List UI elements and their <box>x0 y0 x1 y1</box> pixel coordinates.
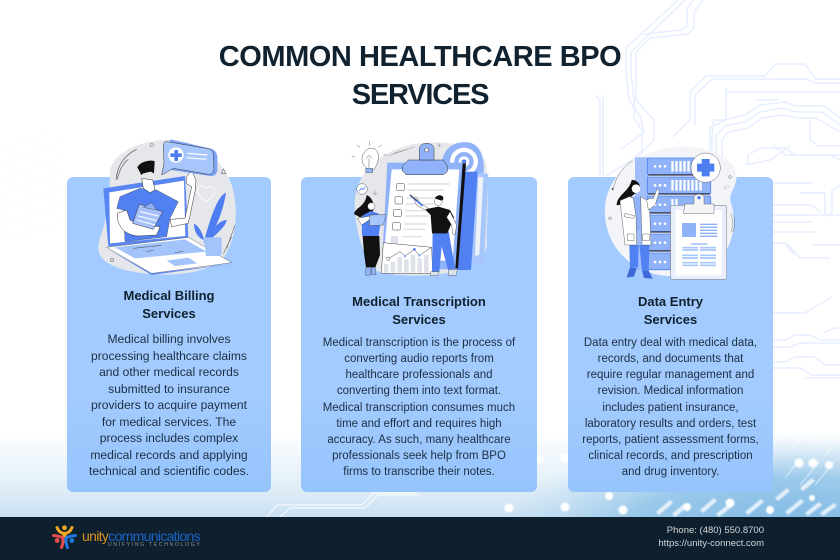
heading: medical billing <box>123 288 214 321</box>
heading: medical transcription: Services <box>392 312 446 327</box>
contact details: Phone: (480) 550.8700 <box>667 525 764 536</box>
text: medical billing description: providers to acquire payment <box>91 398 247 412</box>
text: data entry description: records, and documents that <box>598 353 743 365</box>
icon: clipboard and team illustration <box>352 142 488 276</box>
text: medical transcription description: firms to transcribe their notes. <box>343 466 495 478</box>
icon: doctor with server and clipboard illustration <box>604 146 737 280</box>
heading: data entry <box>638 294 703 327</box>
contact details: https://unity-connect.com <box>658 538 764 549</box>
panel: medical billing <box>67 177 271 492</box>
title <box>219 41 621 111</box>
panel: data entry <box>568 177 773 492</box>
text: medical transcription description: time and effort and requires high <box>336 418 502 430</box>
text: medical transcription description: professionals seek help from BPO <box>332 450 506 462</box>
heading: medical billing: Services <box>142 306 196 321</box>
logo tagline: UNIFYING TECHNOLOGY <box>108 542 201 548</box>
text: data entry description: and drug inventory. <box>622 466 719 478</box>
text: medical transcription description: converting audio reports from <box>344 353 494 365</box>
text: data entry description: reports, patient assessment forms, <box>582 434 759 446</box>
text: data entry description: laboratory results and orders, test <box>585 418 756 430</box>
heading: data entry: Data Entry <box>638 294 703 309</box>
icon: unity communications logo <box>52 525 77 549</box>
text: medical billing description <box>89 332 249 478</box>
text: data entry description: Data entry deal with medical data, <box>584 337 757 349</box>
text: medical billing description: technical and scientific codes. <box>89 464 249 478</box>
footer bar <box>0 517 840 560</box>
heading: medical transcription <box>352 294 486 327</box>
text: data entry description <box>582 337 759 478</box>
text: medical transcription description: Medical transcription consumes much <box>323 402 515 414</box>
text: medical billing description: processing healthcare claims <box>91 348 247 362</box>
title: SERVICES <box>352 79 488 111</box>
text: medical billing description: Medical billing involves <box>107 332 230 346</box>
text: data entry description: clinical records, and prescription <box>588 450 753 462</box>
logo wordmark: unitycommunications <box>82 528 200 544</box>
heading: medical transcription: Medical Transcription <box>352 294 486 309</box>
text: data entry description: require regular management and <box>587 369 754 381</box>
contact details <box>658 525 764 549</box>
text: data entry description: includes patient insurance, <box>602 402 739 414</box>
text: medical transcription description: healthcare professionals and <box>345 369 493 381</box>
text: medical transcription description <box>323 337 516 478</box>
text: medical billing description: and other medical records <box>99 365 239 379</box>
text: medical billing description: process includes complex <box>100 431 238 445</box>
text: medical transcription description: Medical transcription is the process of <box>323 337 515 349</box>
text: data entry description: revision. Medical information <box>598 385 743 397</box>
text: medical transcription description: converting them into text format. <box>337 385 501 397</box>
heading: data entry: Services <box>644 312 697 327</box>
text: medical billing description: medical records and applying <box>90 448 248 462</box>
icon: doctor on laptop illustration <box>98 139 236 275</box>
text: medical transcription description: accuracy. As such, many healthcare <box>327 434 511 446</box>
panel: medical transcription <box>301 177 537 492</box>
text: medical billing description: for medical services. The <box>102 414 236 428</box>
heading: medical billing: Medical Billing <box>123 288 214 303</box>
title: COMMON HEALTHCARE BPO <box>219 41 621 73</box>
text: medical billing description: submitted to insurance <box>108 382 230 396</box>
